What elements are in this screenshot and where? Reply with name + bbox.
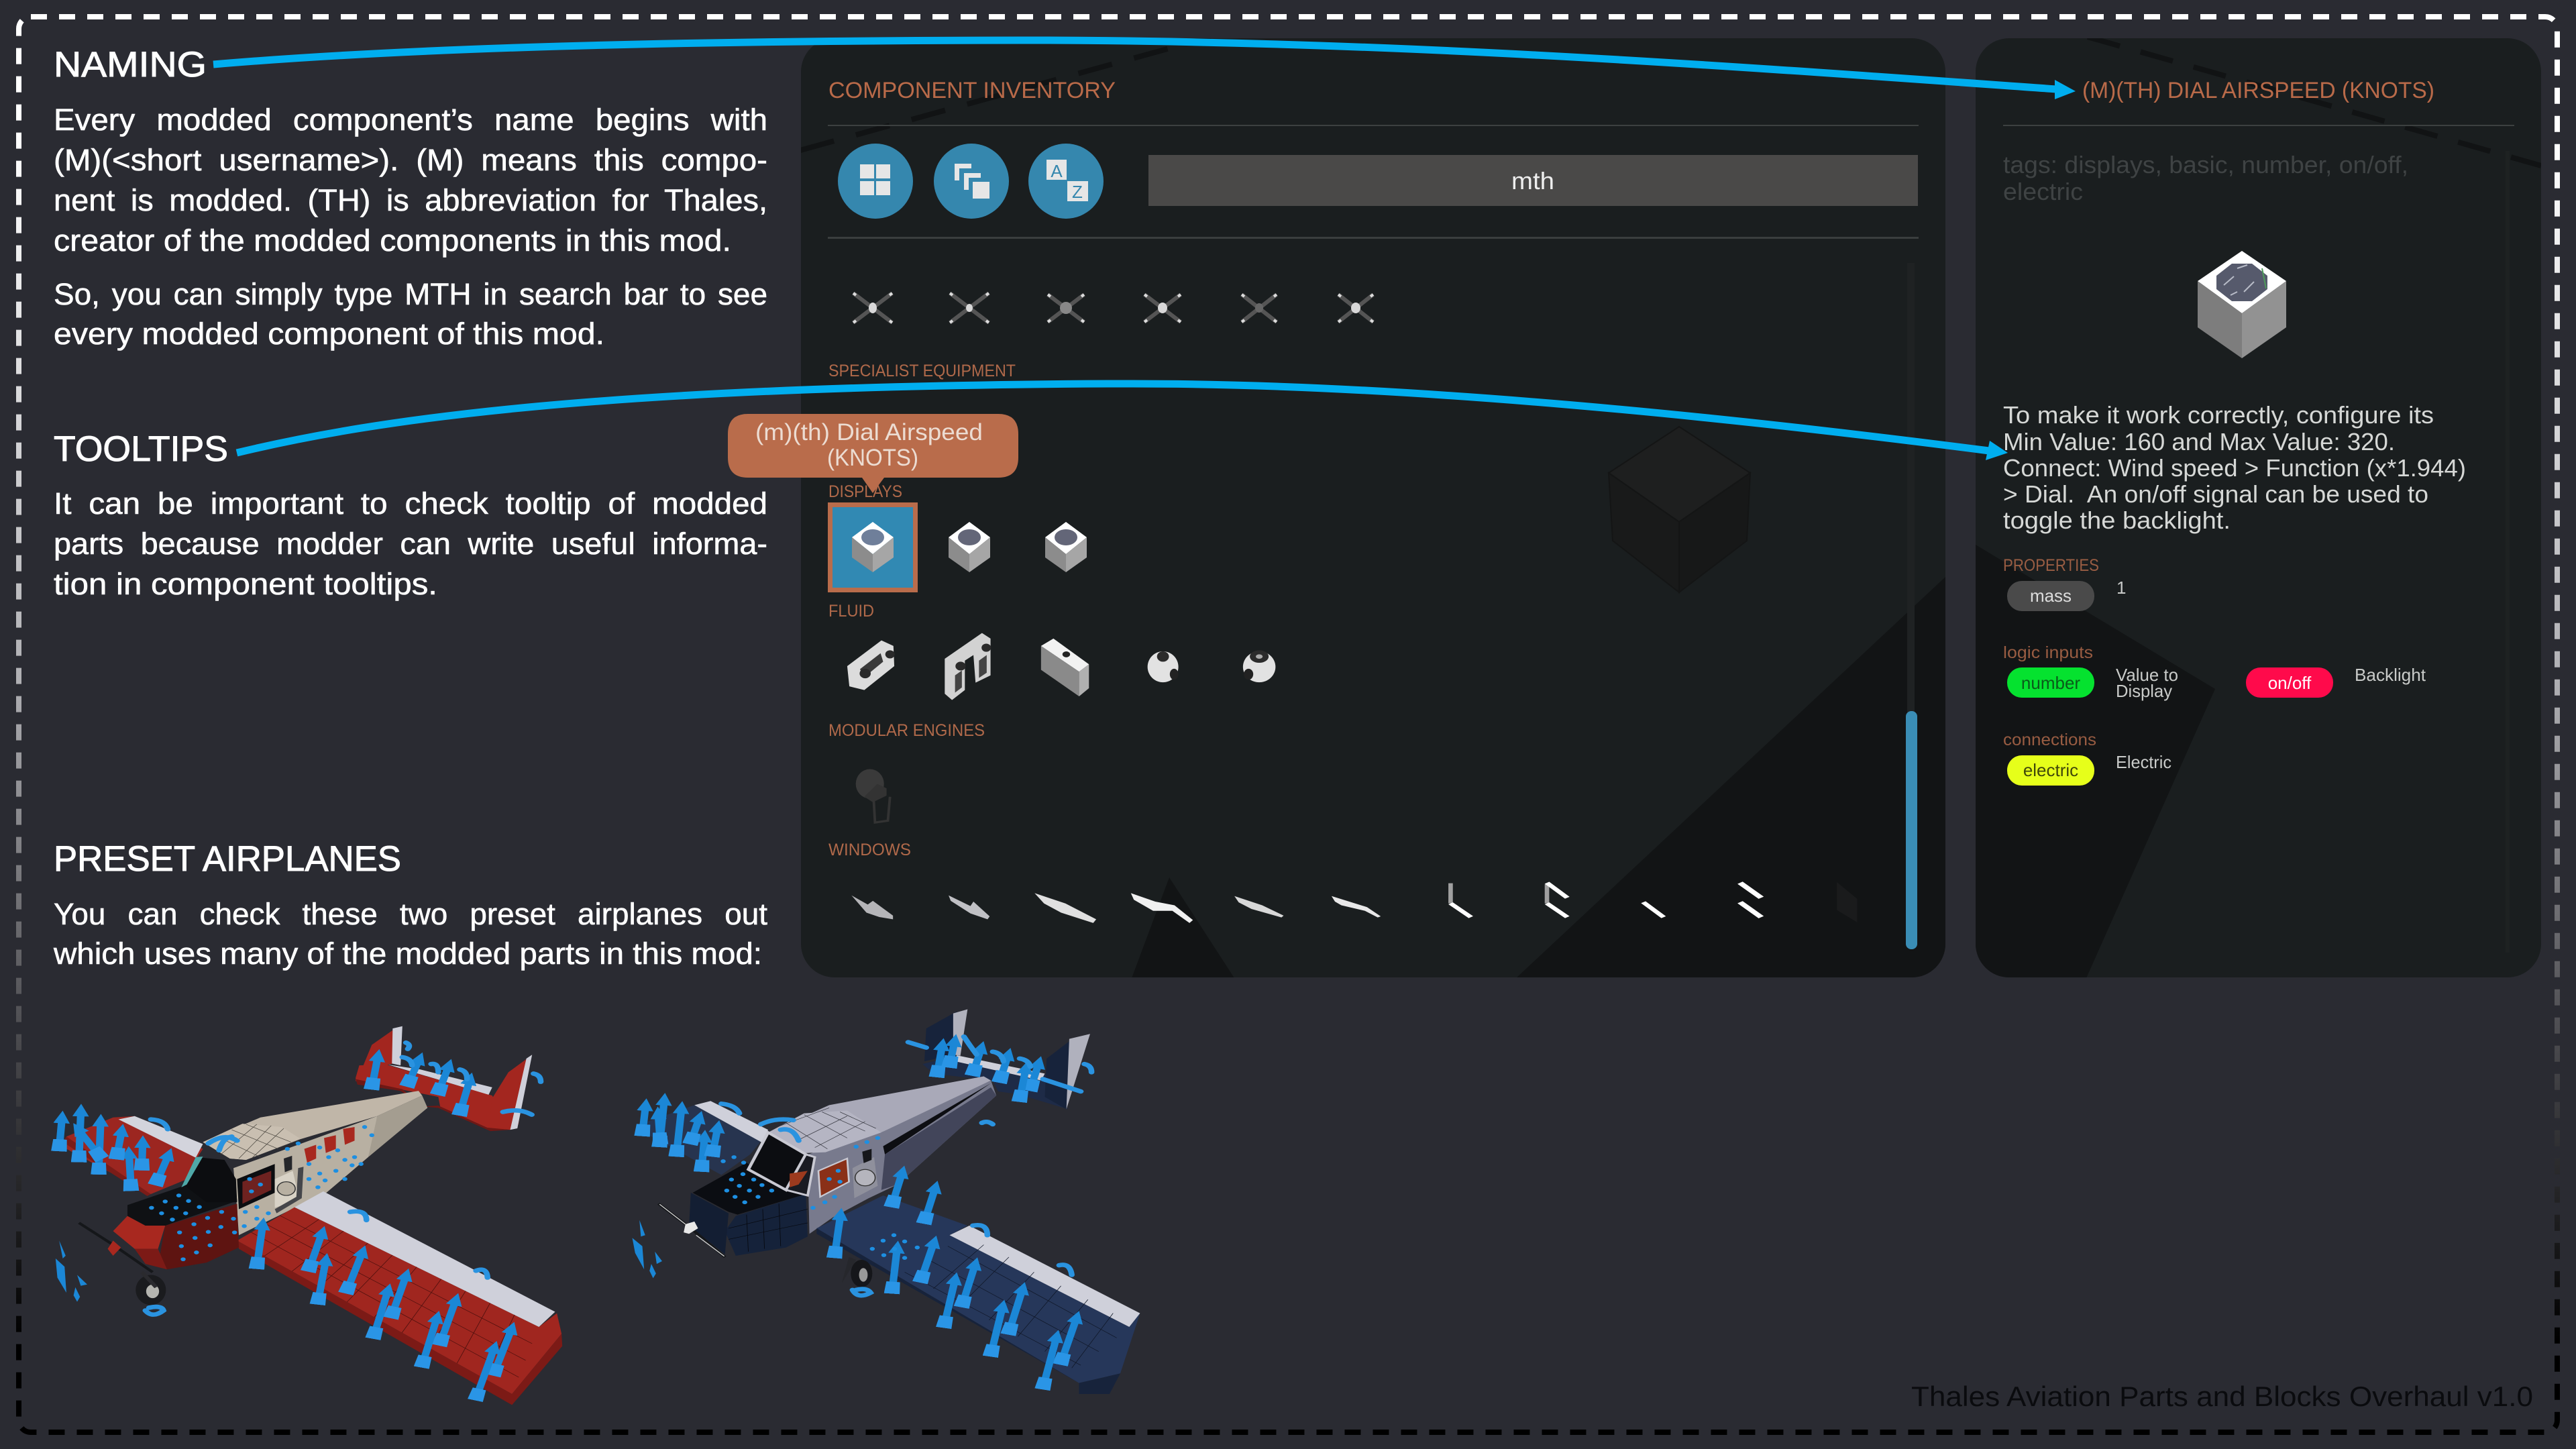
cockpit and windows bbox=[181, 1127, 355, 1214]
row: window icons bbox=[851, 882, 1857, 923]
description text: > Dial. An on/off signal can be used to bbox=[2003, 480, 2428, 508]
propeller and landing gear bbox=[79, 1223, 166, 1305]
text block: naming: (M)(<short username>). (M) means this compo- bbox=[54, 143, 767, 177]
logic inputs section: on/off bbox=[2268, 673, 2312, 693]
scrollbar bbox=[1906, 263, 1917, 949]
tags text: electric bbox=[2003, 178, 2083, 205]
category label: fluid: FLUID bbox=[828, 602, 874, 621]
engine icon bbox=[856, 769, 890, 822]
category label: windows: WINDOWS bbox=[828, 841, 911, 859]
tooltip bubble bbox=[728, 414, 1018, 493]
cg dots bbox=[152, 1127, 372, 1259]
heading: preset airplanes: PRESET AIRPLANES bbox=[54, 839, 401, 879]
button: alphabetical sort bbox=[1028, 144, 1104, 219]
tail bbox=[922, 1009, 1090, 1109]
far wing bbox=[63, 1116, 214, 1196]
connections section: connections bbox=[2003, 731, 2096, 749]
control surface arrows bbox=[632, 1036, 1091, 1387]
logic inputs section bbox=[2003, 643, 2426, 701]
text block: naming: every modded component of this mod. bbox=[54, 317, 604, 351]
tags text: tags: displays, basic, number, on/off, bbox=[2003, 151, 2408, 178]
text block: preset airplanes bbox=[53, 897, 767, 971]
button: grid view bbox=[838, 144, 913, 219]
description text bbox=[2003, 401, 2466, 534]
ghost cube preview bbox=[1609, 427, 1750, 592]
text block: naming: creator of the modded components in this mod. bbox=[54, 223, 731, 258]
connections section bbox=[2003, 731, 2171, 786]
text block: tooltips bbox=[54, 486, 767, 601]
properties section: PROPERTIES bbox=[2003, 556, 2099, 575]
properties section bbox=[2003, 556, 2126, 611]
search bar bbox=[1148, 155, 1918, 206]
description text: Min Value: 160 and Max Value: 320. bbox=[2003, 428, 2395, 455]
control surface arrows bbox=[56, 1042, 541, 1398]
panel title: COMPONENT INVENTORY bbox=[828, 78, 1116, 103]
category label: modular engines: MODULAR ENGINES bbox=[828, 721, 985, 740]
text block: tooltips: It can be important to check tooltip of modded bbox=[54, 486, 767, 521]
propeller and landing gear bbox=[659, 1203, 872, 1287]
display icon 3 bbox=[1045, 522, 1087, 572]
text block: naming: Every modded component’s name begins with bbox=[54, 103, 767, 137]
wing top bbox=[237, 1191, 562, 1405]
button: alphabetical sort: A bbox=[1051, 161, 1063, 181]
button: alphabetical sort: Z bbox=[1072, 182, 1083, 202]
tooltip bubble: (m)(th) Dial Airspeed bbox=[755, 419, 983, 445]
nose bbox=[113, 1182, 239, 1269]
logic inputs section: Backlight bbox=[2355, 665, 2426, 685]
logic inputs section: Display bbox=[2116, 681, 2172, 701]
connections section: electric bbox=[2023, 760, 2078, 780]
component preview cube bbox=[2198, 251, 2286, 358]
arrow: naming to component title bbox=[213, 40, 2076, 99]
cockpit and door bbox=[749, 1132, 877, 1198]
row: propeller icons bbox=[853, 293, 1373, 323]
cg dots bbox=[723, 1138, 917, 1258]
logic inputs section: Value to bbox=[2116, 665, 2178, 685]
panel: component details bbox=[1976, 37, 2541, 978]
arrow: tooltips to description bbox=[237, 384, 2008, 460]
tail bbox=[356, 1026, 532, 1131]
properties section: mass bbox=[2030, 586, 2072, 606]
nose bbox=[689, 1163, 808, 1256]
button: layers view bbox=[934, 144, 1009, 219]
heading: tooltips: TOOLTIPS bbox=[54, 429, 228, 469]
tooltip bubble: (KNOTS) bbox=[827, 445, 918, 471]
text block: tooltips: parts because modder can write useful informa- bbox=[54, 527, 767, 561]
text block: naming: nent is modded. (TH) is abbreviation for Thales, bbox=[54, 183, 767, 217]
panel: component inventory bbox=[728, 37, 1945, 978]
description text: toggle the backlight. bbox=[2003, 506, 2231, 534]
description text: To make it work correctly, configure its bbox=[2003, 401, 2434, 429]
selected display tile bbox=[830, 504, 915, 590]
footer credit: Thales Aviation Parts and Blocks Overhaul v1.0 bbox=[1911, 1381, 2533, 1412]
fuselage bbox=[203, 1091, 427, 1235]
description text: Connect: Wind speed > Function (x*1.944) bbox=[2003, 454, 2466, 482]
text block: preset airplanes: which uses many of the modded parts in this mod: bbox=[53, 936, 762, 971]
search bar: mth bbox=[1511, 167, 1554, 195]
component title: (M)(TH) DIAL AIRSPEED (KNOTS) bbox=[2082, 78, 2434, 103]
row: fluid icons bbox=[847, 633, 1275, 700]
logic inputs section: number bbox=[2021, 673, 2080, 693]
text block: preset airplanes: You can check these two preset airplanes out bbox=[54, 897, 767, 931]
category label: displays: DISPLAYS bbox=[828, 482, 902, 501]
properties section: 1 bbox=[2116, 578, 2126, 598]
connections section: Electric bbox=[2116, 752, 2171, 772]
category label: specialist equipment: SPECIALIST EQUIPMENT bbox=[828, 362, 1016, 380]
text block: tooltips: tion in component tooltips. bbox=[54, 567, 437, 601]
tags text bbox=[2003, 151, 2408, 205]
fuselage bbox=[768, 1077, 996, 1234]
airplane: red preset bbox=[56, 1026, 562, 1405]
logic inputs section: logic inputs bbox=[2003, 643, 2093, 662]
display icon 2 bbox=[949, 522, 990, 572]
heading: naming: NAMING bbox=[54, 45, 207, 85]
near wing bbox=[816, 1195, 1140, 1394]
text block: naming bbox=[54, 103, 767, 351]
far wing bbox=[644, 1101, 768, 1175]
airplane: blue preset bbox=[632, 1009, 1140, 1394]
text block: naming: So, you can simply type MTH in search bar to see bbox=[54, 277, 767, 311]
